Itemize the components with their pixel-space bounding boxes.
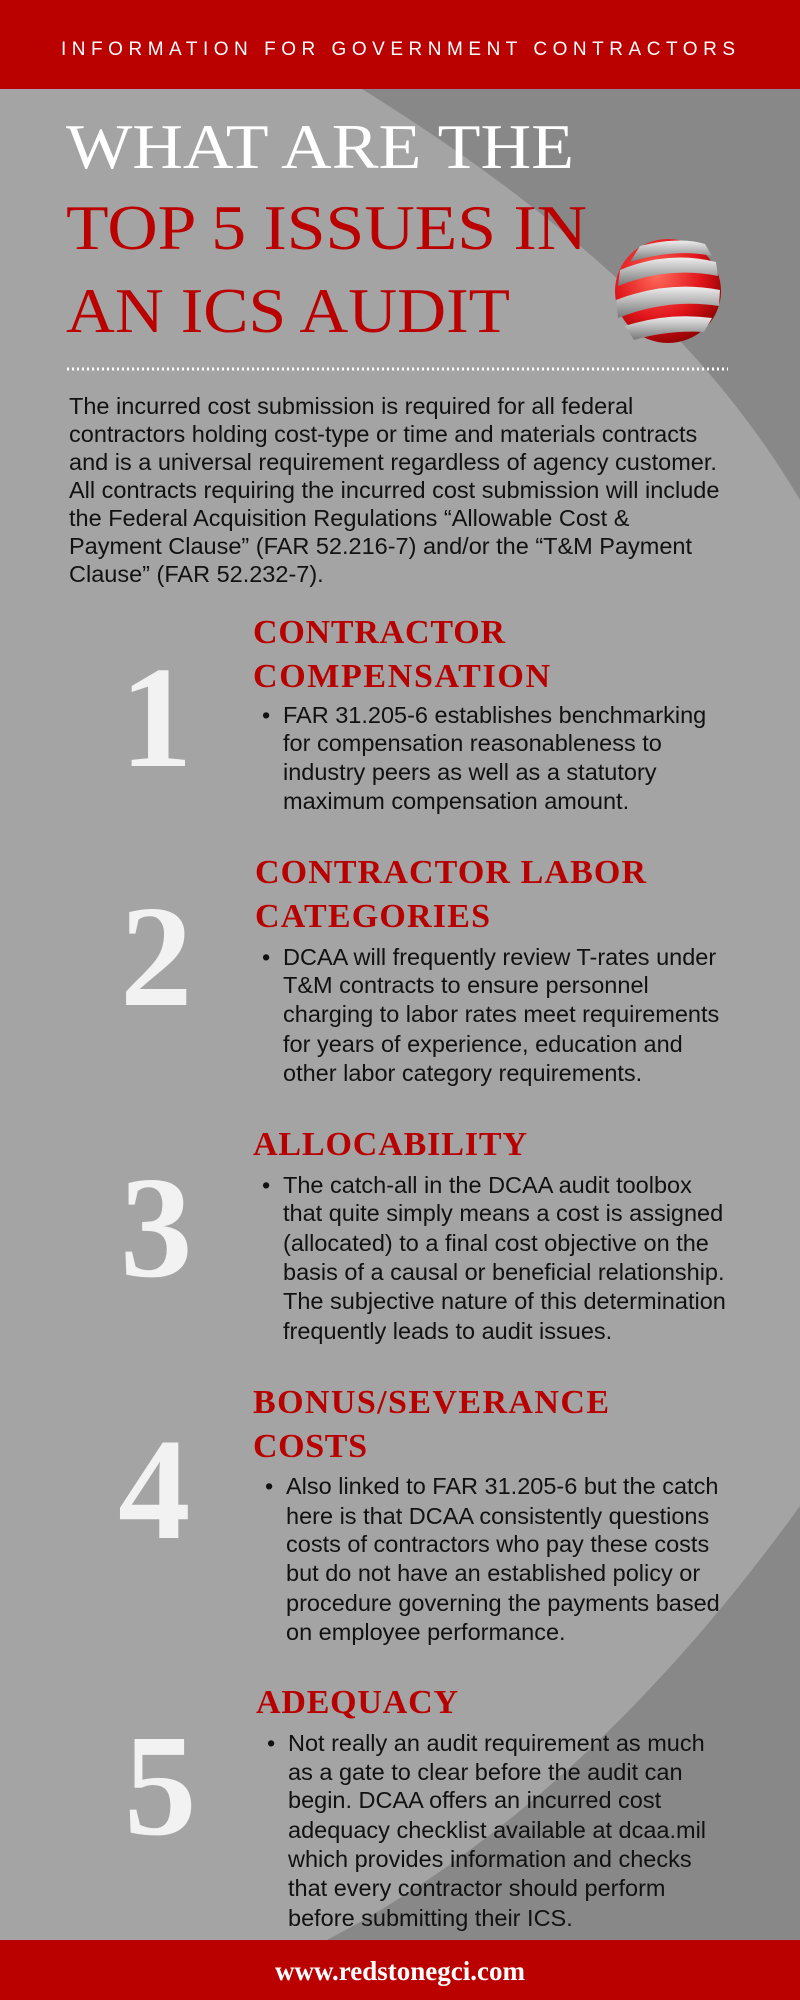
footer bar bbox=[0, 1940, 800, 2000]
item 3: The catch-all in the DCAA audit toolbox bbox=[283, 1172, 692, 1198]
title: TOP 5 ISSUES IN bbox=[66, 192, 587, 263]
item 5: as a gate to clear before the audit can bbox=[288, 1759, 683, 1785]
icon: sphere bbox=[615, 239, 721, 343]
intro text: and is a universal requirement regardless of agency customer. bbox=[69, 449, 717, 475]
intro text: Payment Clause” (FAR 52.216-7) and/or the “T&M Payment bbox=[69, 533, 692, 559]
item 5 bbox=[124, 1684, 706, 1931]
item 4: costs of contractors who pay these costs bbox=[286, 1531, 709, 1557]
item 1: COMPENSATION bbox=[253, 658, 550, 695]
item 5: begin. DCAA offers an incurred cost bbox=[288, 1787, 662, 1813]
item 2 bbox=[120, 854, 719, 1086]
intro text bbox=[69, 393, 719, 587]
item 1: CONTRACTOR bbox=[253, 614, 505, 651]
item 1: 1 bbox=[120, 638, 192, 798]
item 1 bbox=[120, 614, 706, 814]
item 1: maximum compensation amount. bbox=[283, 788, 629, 814]
item 4: on employee performance. bbox=[286, 1619, 566, 1645]
item 5: Not really an audit requirement as much bbox=[288, 1730, 705, 1756]
item 1: • bbox=[262, 702, 270, 728]
item 3: that quite simply means a cost is assigned bbox=[283, 1200, 723, 1226]
title bbox=[66, 111, 587, 346]
item 2: 2 bbox=[120, 877, 192, 1037]
item 3: basis of a causal or beneficial relationship. bbox=[283, 1259, 725, 1285]
divider dotted bbox=[67, 368, 728, 370]
footer bar: www.redstonegci.com bbox=[275, 1956, 525, 1986]
item 5: which provides information and checks bbox=[287, 1846, 692, 1872]
item 2: T&M contracts to ensure personnel bbox=[283, 972, 649, 998]
item 3: • bbox=[262, 1172, 270, 1198]
header bar: INFORMATION FOR GOVERNMENT CONTRACTORS bbox=[61, 39, 735, 60]
item 4: but do not have an established policy or bbox=[286, 1560, 700, 1586]
intro text: the Federal Acquisition Regulations “Allowable Cost & bbox=[69, 505, 630, 531]
item 2: charging to labor rates meet requirements bbox=[283, 1001, 719, 1027]
item 3 bbox=[120, 1126, 726, 1344]
item 2: for years of experience, education and bbox=[283, 1031, 683, 1057]
item 5: ADEQUACY bbox=[256, 1684, 458, 1721]
header bar bbox=[0, 0, 800, 89]
item 4: Also linked to FAR 31.205-6 but the catch bbox=[286, 1473, 718, 1499]
item 3: 3 bbox=[120, 1148, 192, 1308]
item 5: • bbox=[267, 1730, 275, 1756]
item 5: adequacy checklist available at dcaa.mil bbox=[288, 1817, 706, 1843]
item 1: FAR 31.205-6 establishes benchmarking bbox=[283, 702, 706, 728]
item 3: frequently leads to audit issues. bbox=[283, 1318, 612, 1344]
item 3: The subjective nature of this determination bbox=[283, 1288, 726, 1314]
intro text: contractors holding cost-type or time and materials contracts bbox=[69, 421, 697, 447]
item 2: DCAA will frequently review T-rates under bbox=[283, 944, 716, 970]
intro text: All contracts requiring the incurred cost submission will include bbox=[69, 477, 719, 503]
item 4 bbox=[118, 1384, 720, 1645]
item 1: for compensation reasonableness to bbox=[283, 730, 662, 756]
item 5: 5 bbox=[124, 1706, 196, 1866]
item 4: procedure governing the payments based bbox=[286, 1590, 720, 1616]
item 1: industry peers as well as a statutory bbox=[283, 759, 657, 785]
item 4: BONUS/SEVERANCE bbox=[253, 1384, 609, 1421]
title: WHAT ARE THE bbox=[66, 111, 574, 182]
item 5: before submitting their ICS. bbox=[288, 1905, 573, 1931]
item 2: other labor category requirements. bbox=[283, 1060, 642, 1086]
item 3: (allocated) to a final cost objective on the bbox=[283, 1230, 709, 1256]
intro text: Clause” (FAR 52.232-7). bbox=[69, 561, 324, 587]
item 4: COSTS bbox=[253, 1428, 367, 1465]
item 4: 4 bbox=[118, 1410, 190, 1570]
item 2: • bbox=[262, 944, 270, 970]
item 2: CONTRACTOR LABOR bbox=[255, 854, 646, 891]
item 3: ALLOCABILITY bbox=[253, 1126, 527, 1163]
item 2: CATEGORIES bbox=[255, 898, 490, 935]
item 4: • bbox=[265, 1473, 273, 1499]
intro text: The incurred cost submission is required for all federal bbox=[69, 393, 633, 419]
item 4: here is that DCAA consistently questions bbox=[286, 1503, 709, 1529]
title: AN ICS AUDIT bbox=[66, 275, 510, 346]
item 5: that every contractor should perform bbox=[288, 1875, 665, 1901]
